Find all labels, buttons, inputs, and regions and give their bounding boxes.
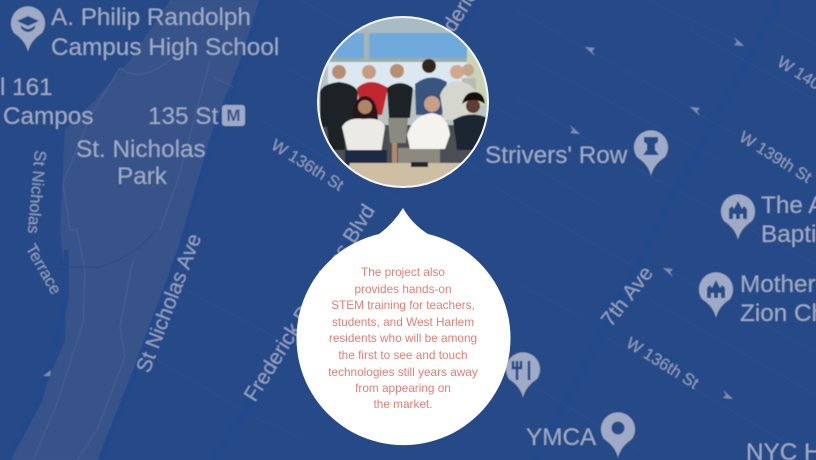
map background: Bapti — [761, 221, 816, 248]
label: 161: l 161 — [0, 74, 53, 101]
street labels: W 136th St — [268, 136, 347, 195]
street labels: 7th Ave — [597, 262, 658, 331]
bubble text: students, and West Harlem — [332, 315, 474, 329]
street labels: Terrace — [22, 241, 65, 298]
label: Strivers' Row: Strivers' Row — [485, 142, 628, 169]
street labels: St Nicholas — [24, 150, 49, 234]
icon: school pin — [11, 6, 45, 52]
label: school: A. Philip Randolph — [51, 4, 251, 31]
park area — [8, 0, 262, 460]
photo circle — [317, 16, 489, 190]
bubble text: STEM training for teachers, — [331, 298, 475, 312]
table — [348, 162, 462, 186]
bubble text: provides hands-on — [354, 282, 452, 296]
label: St Nicholas Park: St. Nicholas — [76, 136, 206, 163]
bubble text: the first to see and touch — [338, 348, 468, 362]
speech bubble — [296, 208, 510, 445]
map background: Park — [117, 163, 168, 190]
bubble text: residents who will be among — [329, 331, 477, 345]
street labels: W 136th St — [623, 334, 702, 393]
icon: church pin — [721, 194, 755, 240]
people — [320, 59, 488, 165]
bubble text: from appearing on — [355, 381, 451, 395]
icon: restaurant pin — [506, 352, 540, 398]
street labels: Frederick Douglass Blvd — [240, 200, 380, 406]
label: YMCA: YMCA — [526, 424, 597, 451]
icon: subway — [222, 105, 245, 126]
bubble text: the market. — [373, 397, 433, 411]
arrows on streets — [43, 37, 744, 399]
bubble text: The project also — [361, 265, 445, 279]
label: Campos: Campos — [3, 103, 93, 130]
street labels: St Nicholas Ave — [132, 231, 206, 376]
icon: YMCA pin — [601, 412, 635, 458]
icon: landmark pin — [634, 130, 668, 176]
bubble text — [328, 265, 478, 411]
bubble text: technologies still years away — [328, 365, 478, 379]
icon: subway: M — [226, 106, 241, 125]
label: 135 St: 135 St — [148, 103, 218, 130]
icon: church pin 2 — [699, 272, 733, 318]
street labels: W 139th St — [736, 128, 815, 187]
map background: Campus High School — [51, 34, 279, 61]
label: Mother Zion: Mother — [740, 271, 816, 298]
